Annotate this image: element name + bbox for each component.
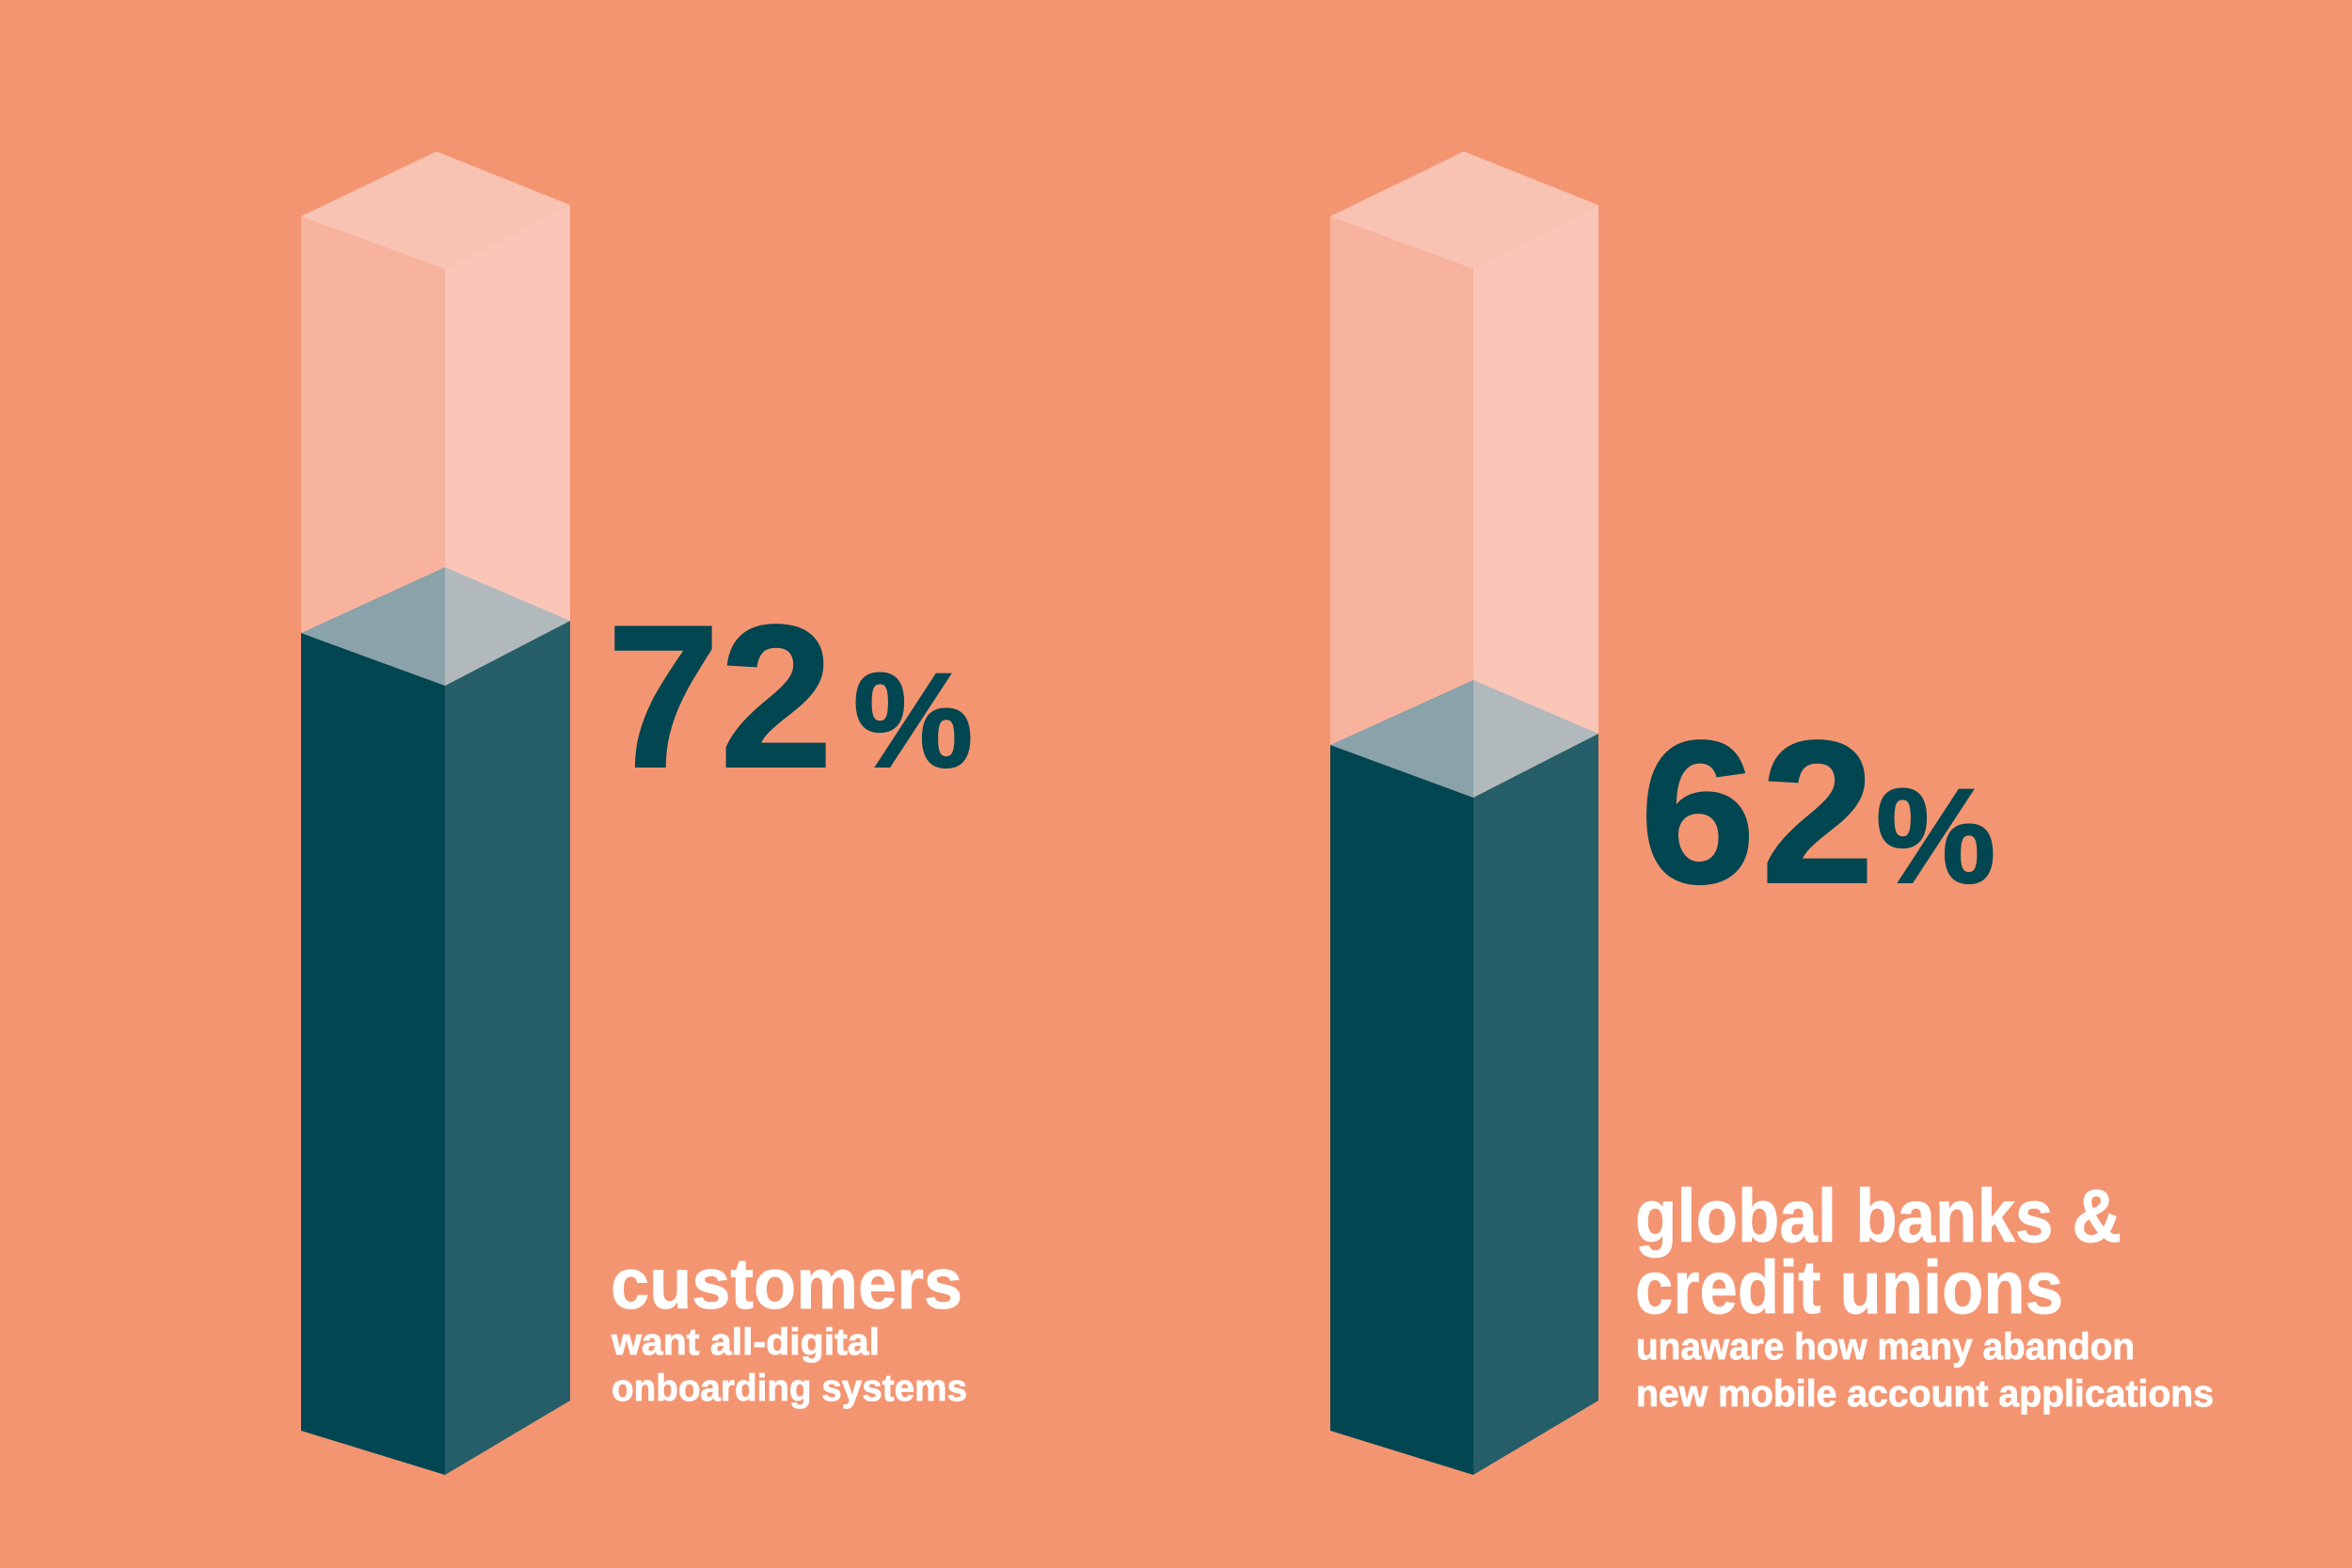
chart: 72 percent column <box>301 151 570 1475</box>
fill surface right half <box>1473 680 1598 798</box>
empty column right face <box>445 205 570 686</box>
empty column left face <box>1330 216 1473 798</box>
filled left face <box>1330 745 1473 1475</box>
stat: 62% <box>1640 698 1995 926</box>
stat: 62%: 2 <box>1761 698 1874 926</box>
label: customers: want all-digital <box>611 1322 880 1363</box>
chart: 62 percent column <box>1330 151 1598 1475</box>
label: customers: customers <box>611 1244 962 1324</box>
filled left face <box>301 633 445 1475</box>
label: customers <box>611 1244 967 1409</box>
column top face <box>1330 151 1598 269</box>
stat: 62%: % <box>1876 762 1995 911</box>
empty column right face <box>1473 205 1598 798</box>
label: global banks and credit unions: unaware how many abandon <box>1636 1326 2135 1368</box>
label: global banks and credit unions: global banks & <box>1635 1174 2122 1258</box>
filled right face <box>1473 734 1598 1475</box>
label: global banks and credit unions <box>1635 1174 2214 1415</box>
stat: 72% <box>607 582 973 810</box>
column top face <box>301 151 570 269</box>
stat: 62%: 6 <box>1640 698 1756 926</box>
label: global banks and credit unions: credit unions <box>1635 1245 2063 1329</box>
filled right face <box>445 621 570 1475</box>
empty column left face <box>301 216 445 686</box>
fill surface left half <box>1330 680 1473 798</box>
label: customers: onboarding systems <box>612 1368 967 1409</box>
fill surface right half <box>445 567 570 686</box>
label: global banks and credit unions: new mobile account applications <box>1636 1373 2214 1415</box>
stat: 72%: 72 <box>607 582 833 810</box>
stat: 72%: % <box>853 646 973 796</box>
fill surface left half <box>301 567 445 686</box>
